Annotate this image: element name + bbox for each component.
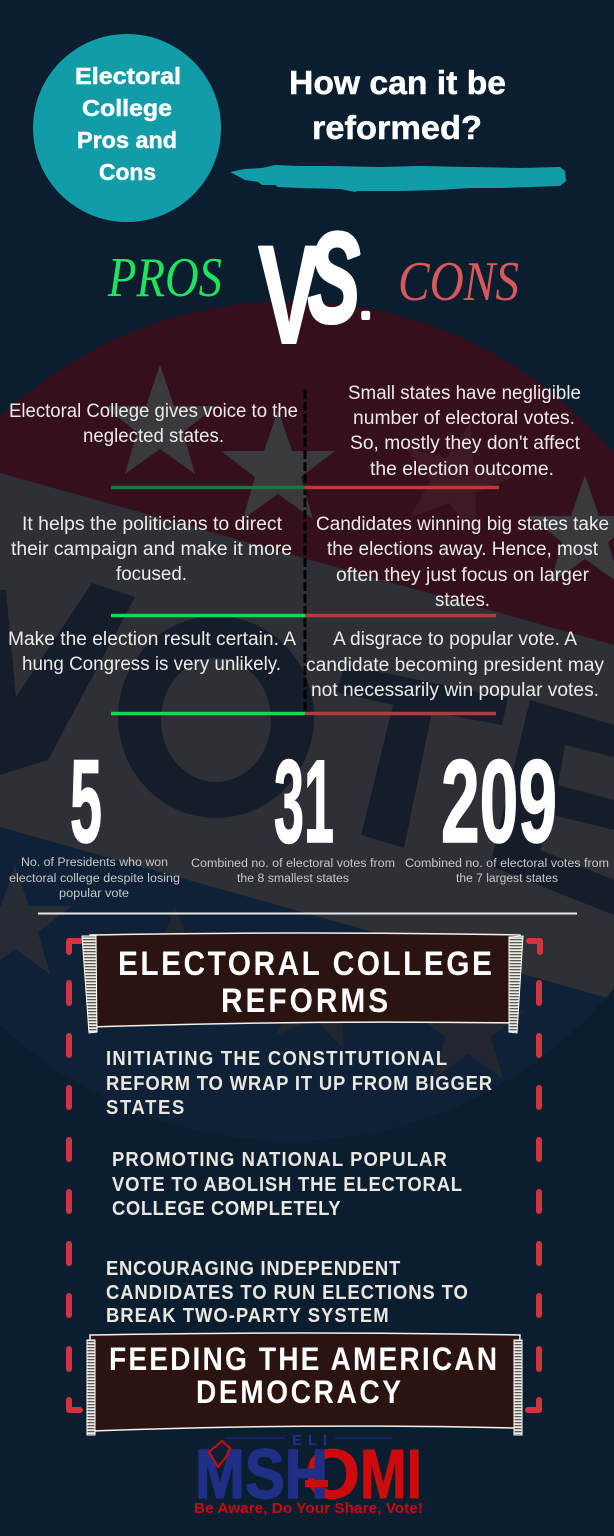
row 1 con: Small states have negligible <box>348 383 581 404</box>
vs label: . <box>361 288 370 326</box>
row 1 divider <box>111 486 499 489</box>
center dashed divider <box>304 390 306 716</box>
reform 1: STATES <box>106 1096 184 1119</box>
reform 1: INITIATING THE CONSTITUTIONAL <box>106 1047 447 1070</box>
row 2 pro: It helps the politicians to direct <box>22 514 283 535</box>
stat: 209 votes: Combined no. of electoral votes from <box>405 858 609 870</box>
banner: electoral college reforms: ELECTORAL COLLEGE <box>118 944 492 982</box>
reform 1 <box>106 1047 492 1119</box>
row 1 con: So, mostly they don't affect <box>350 433 581 454</box>
row 2 con: states. <box>435 590 490 611</box>
stat: 5 presidents: electoral college despite losing <box>9 873 180 885</box>
stat: 31 votes: Combined no. of electoral votes from <box>191 858 395 870</box>
row 3 divider <box>111 712 496 715</box>
row 3 pro: Make the election result certain. A <box>8 629 296 650</box>
stat: 5 presidents: 5 <box>70 736 102 868</box>
brush stroke underline <box>230 165 566 192</box>
reform 2 <box>112 1148 462 1220</box>
heading: how can it be reformed: How can it be <box>289 64 506 101</box>
white separator <box>38 912 577 914</box>
row 2 con: the elections away. Hence, most <box>327 539 599 560</box>
row 2 con <box>316 514 609 611</box>
circle badge: title <box>33 34 221 222</box>
banner: feeding the american democracy <box>87 1333 522 1435</box>
row 2 con: often they just focus on larger <box>336 565 590 586</box>
stat: 209 votes: the 7 largest states <box>456 873 558 885</box>
reform 3: CANDIDATES TO RUN ELECTIONS TO <box>106 1281 468 1304</box>
logo: Eli Mshomi: MSH <box>195 1435 328 1513</box>
vs label: V <box>258 216 320 373</box>
stat: 5 presidents: popular vote <box>59 888 129 900</box>
banner: electoral college reforms <box>82 933 523 1033</box>
background: vote button photo <box>0 301 614 1079</box>
row 1 pro: neglected states. <box>83 426 224 447</box>
row 3 con: not necessarily win popular votes. <box>311 680 599 701</box>
reform 3: ENCOURAGING INDEPENDENT <box>106 1257 400 1280</box>
circle badge: title: Pros and <box>77 127 177 153</box>
row 1 con: the election outcome. <box>370 459 554 480</box>
row 3 pro: hung Congress is very unlikely. <box>22 654 281 675</box>
stat: 31 votes: the 8 smallest states <box>237 873 349 885</box>
stat: 5 presidents: No. of Presidents who won <box>21 857 168 869</box>
reform 2: PROMOTING NATIONAL POPULAR <box>112 1148 447 1171</box>
row 3 con <box>306 629 604 701</box>
heading: how can it be reformed: reformed? <box>312 109 482 146</box>
red dashed frame <box>69 941 540 1410</box>
reform 2: VOTE TO ABOLISH THE ELECTORAL <box>112 1173 462 1196</box>
stat: 31 votes: 31 <box>274 736 334 868</box>
banner: feeding the american democracy: DEMOCRACY <box>196 1375 401 1410</box>
circle badge: title: College <box>82 95 172 121</box>
banner: feeding the american democracy: FEEDING THE AMERICAN <box>109 1342 497 1377</box>
pros label: PROS <box>107 247 222 309</box>
logo: Eli Mshomi: O <box>305 1435 360 1513</box>
reform 2: COLLEGE COMPLETELY <box>112 1197 341 1220</box>
banner: electoral college reforms: REFORMS <box>221 981 388 1019</box>
row 3 con: candidate becoming president may <box>306 655 604 676</box>
stat: 5 presidents <box>9 736 180 900</box>
cons label: CONS <box>398 251 519 313</box>
row 1 pro <box>9 401 298 447</box>
icon: fez hat <box>209 1441 230 1467</box>
row 1 pro: Electoral College gives voice to the <box>9 401 298 422</box>
logo: Eli Mshomi: ELI <box>292 1432 327 1449</box>
row 2 pro: focused. <box>116 564 187 585</box>
circle badge: title: Electoral <box>75 63 181 89</box>
reform 3 <box>106 1257 468 1327</box>
row 2 divider <box>111 614 496 617</box>
logo: Eli Mshomi: Be Aware, Do Your Share, Vote! <box>194 1500 423 1517</box>
row 2 con: Candidates winning big states take <box>316 514 609 535</box>
row 1 con <box>348 383 581 480</box>
vs label: S <box>308 207 360 350</box>
row 3 con: A disgrace to popular vote. A <box>333 629 577 650</box>
row 2 pro <box>11 514 292 585</box>
row 3 pro <box>8 629 296 675</box>
logo: Eli Mshomi <box>194 1432 423 1517</box>
reform 3: BREAK TWO-PARTY SYSTEM <box>106 1304 389 1327</box>
reform 1: REFORM TO WRAP IT UP FROM BIGGER <box>106 1072 492 1095</box>
stat: 31 votes <box>191 736 395 885</box>
circle badge: title: Cons <box>99 159 156 185</box>
row 1 con: number of electoral votes. <box>353 408 575 429</box>
row 2 pro: their campaign and make it more <box>11 539 292 560</box>
heading: how can it be reformed <box>289 64 506 146</box>
logo: Eli Mshomi: MI <box>360 1435 422 1513</box>
